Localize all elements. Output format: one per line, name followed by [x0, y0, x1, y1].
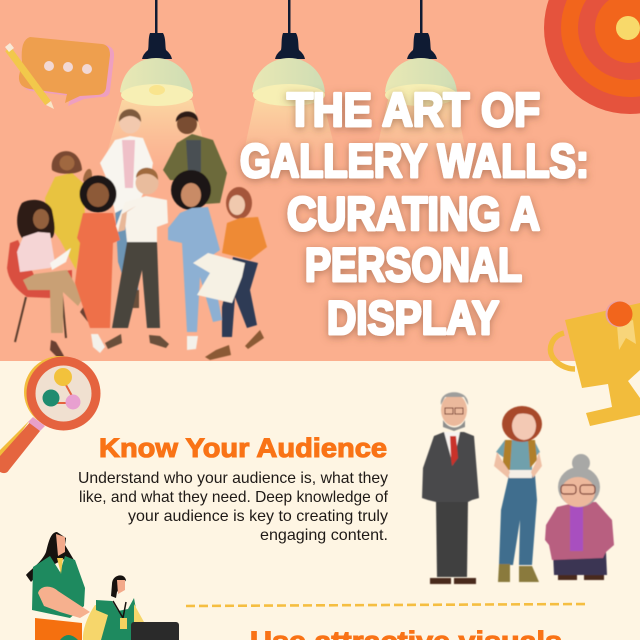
heading: Know Your Audience: Know Your Audience	[99, 433, 387, 463]
lamp 3	[372, 0, 470, 170]
lamp 2	[240, 0, 340, 170]
body text: Know Your Audience	[78, 470, 389, 544]
person: man in white t-shirt	[105, 168, 169, 349]
body text: Know Your Audience: your audience is key to creating truly	[128, 508, 388, 525]
dashed divider	[186, 604, 588, 606]
target icon	[544, 0, 640, 114]
illustration: team of eight people	[7, 109, 267, 360]
title: THE ART OF	[287, 83, 540, 136]
person: woman in orange jumpsuit	[75, 176, 120, 353]
laptop	[131, 622, 179, 640]
illustration: women at a laptop	[26, 532, 179, 640]
body text: Know Your Audience: like, and what they need. Deep knowledge of	[79, 489, 389, 506]
person: grandmother	[545, 454, 614, 580]
person: man in olive jacket	[163, 111, 227, 204]
pink blouse	[17, 232, 55, 272]
title: DISPLAY	[327, 291, 499, 344]
person: woman in blue jumpsuit	[168, 170, 222, 350]
header background	[0, 0, 640, 361]
person: man in white coat	[100, 109, 153, 308]
title: CURATING A	[287, 187, 540, 240]
person: young woman with backpack	[494, 406, 542, 582]
plans paper	[193, 253, 245, 303]
medal	[606, 301, 632, 327]
woman with lanyard	[83, 575, 144, 640]
title: PERSONAL	[305, 238, 522, 291]
person: older man in suit	[422, 392, 479, 584]
chair	[7, 240, 72, 298]
body text: Know Your Audience: engaging content.	[260, 527, 388, 544]
trophy icon	[550, 301, 640, 426]
lamp 1	[102, 0, 212, 170]
title	[240, 83, 589, 344]
person: sitting woman	[7, 200, 110, 360]
person: woman in orange shirt	[193, 187, 267, 360]
medal ribbon	[617, 320, 636, 350]
body text: Know Your Audience: Understand who your audience is, what they	[78, 470, 388, 487]
audience illustration: three people	[422, 392, 614, 584]
content background	[0, 361, 640, 640]
magnifying glass icon	[0, 356, 100, 473]
person: woman in yellow dress	[45, 151, 92, 270]
pencil icon	[5, 43, 54, 109]
speech bubble icon	[19, 37, 114, 106]
tan trousers	[23, 270, 83, 333]
woman in green	[26, 532, 90, 640]
